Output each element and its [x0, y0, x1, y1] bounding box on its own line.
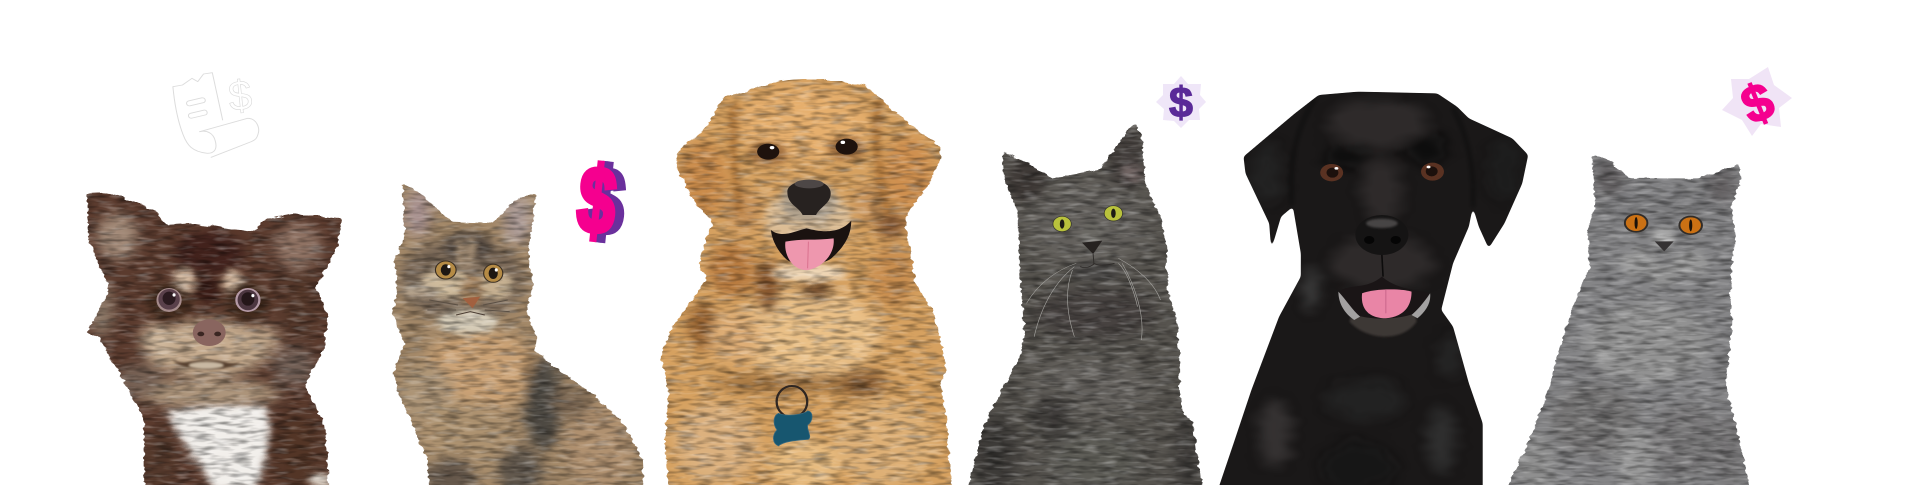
labrador coat [1212, 87, 1536, 485]
kitten fur body [389, 180, 649, 485]
british shorthair eyes and nose [1624, 213, 1703, 251]
retriever fur body [655, 73, 961, 485]
photo: golden retriever [655, 73, 961, 485]
icon: 3D pink and purple dollar sign: $ [573, 147, 621, 255]
bone-shaped blue collar tag [773, 386, 812, 446]
retriever eyes, nose and open mouth [757, 139, 858, 270]
icon: purple dollar in pale burst [1156, 76, 1206, 128]
icon: receipt with dollar sign outline [173, 71, 259, 157]
photo: black labrador [1212, 87, 1536, 485]
photo: tabby maine coon kitten [389, 180, 649, 485]
chihuahua fur body [75, 187, 343, 485]
british shorthair fur body [1501, 150, 1758, 485]
photo: british shorthair cat [1501, 150, 1758, 485]
icon: receipt with dollar sign outline: $ [226, 71, 254, 120]
kitten eyes, nose and muzzle [427, 261, 510, 315]
icon: pink dollar in pale burst: $ [1733, 72, 1782, 136]
grey cat eyes, nose and whiskers [1027, 206, 1160, 340]
grey cat fur body [961, 117, 1210, 485]
labrador eyes, nose and tongue [1320, 163, 1444, 337]
icon: purple dollar in pale burst: $ [1169, 79, 1193, 127]
scene: row of pets with dollar icons [86, 67, 1792, 485]
icon: 3D pink and purple dollar sign: $ [582, 148, 630, 256]
photo: grey long-haired cat [961, 117, 1210, 485]
photo: brown and white chihuahua [75, 187, 343, 485]
chihuahua eyes, nose and mouth [156, 288, 261, 369]
icon: 3D pink and purple dollar sign: $ [578, 148, 626, 256]
icon: pink dollar in pale burst [1722, 67, 1792, 136]
